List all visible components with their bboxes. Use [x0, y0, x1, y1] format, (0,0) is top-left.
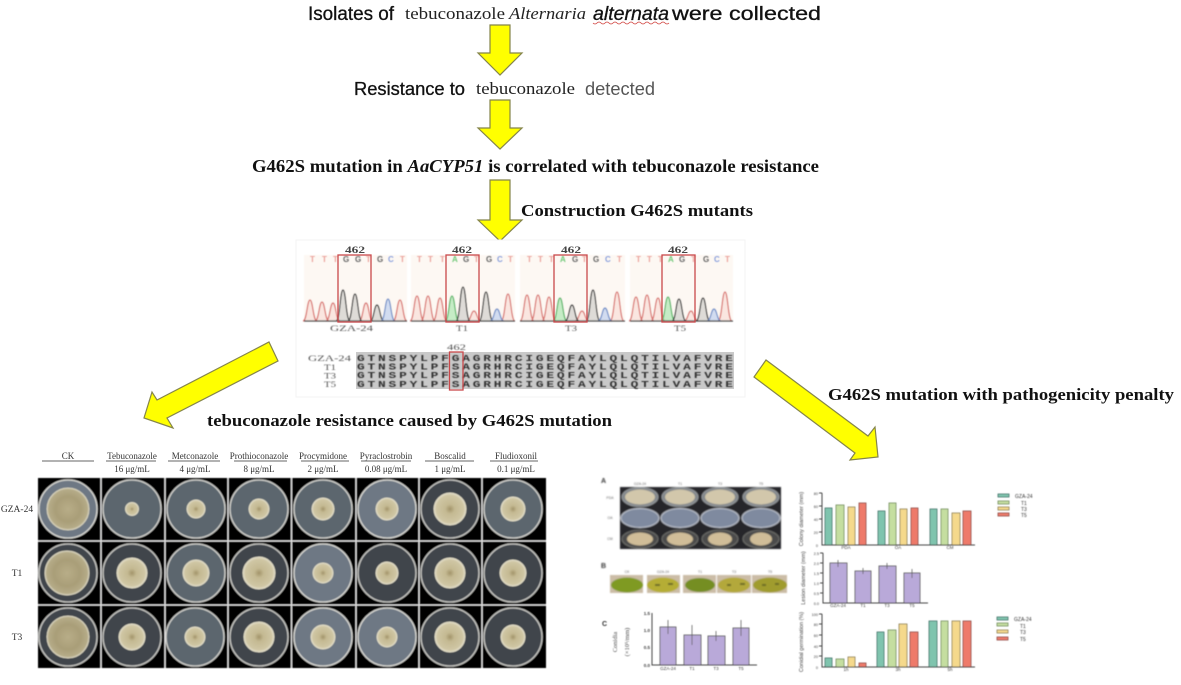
chart: colony diameter: [799, 492, 975, 550]
legend: colony diameter: [998, 494, 1033, 519]
heading: resistance caused by mutation: tebuconazole resistance caused by G462S mutation: [207, 411, 612, 430]
column headers: CK: [62, 451, 75, 461]
codon position labels: 462: [452, 245, 473, 255]
legend: conidial germination: T1: [1020, 624, 1026, 630]
column headers: 4 μg/mL: [179, 464, 211, 474]
sample labels: T1: [456, 323, 468, 333]
subpanel B: infected leaves: T1: [698, 570, 702, 574]
heading: resistance detected: [354, 78, 655, 99]
heading: isolates collected: Alternaria: [508, 4, 586, 23]
trace: T5: [629, 292, 732, 321]
chart: conidial germination: 5h: [947, 667, 953, 672]
chart: lesion diameter: 1.0: [814, 582, 819, 586]
protein alignment: GTNSPYLPFGAGRHRCIGEQFAYLQLQTILVAFVRE: [357, 354, 733, 364]
arrow: resistance to mutation: [478, 100, 522, 149]
column headers: Fludioxonil: [495, 451, 537, 461]
heading: resistance detected: detected: [585, 79, 655, 99]
subpanel A: media plates: CM: [607, 537, 613, 541]
panel: pathogenicity figures: [601, 478, 1033, 672]
subpanel A: media plates: T3: [718, 482, 722, 486]
chart: colony diameter: OA: [895, 545, 901, 550]
heading: isolates collected: were collected: [671, 4, 821, 25]
heading: isolates collected: Isolates of: [308, 4, 395, 25]
heading: resistance detected: tebuconazole: [476, 79, 575, 98]
column headers: Pyraclostrobin: [360, 451, 413, 461]
heading: pathogenicity penalty: G462S mutation with pathogenicity penalty: [828, 385, 1175, 404]
protein alignment: 462: [447, 342, 466, 352]
legend: colony diameter: GZA-24: [1015, 494, 1033, 500]
chart: conidial germination: Conidial germination (%): [799, 612, 805, 672]
row labels: T1: [12, 569, 23, 579]
legend: conidial germination: T5: [1020, 637, 1026, 643]
protein alignment: GTNSPYLPFSAGRHRCIGEQFAYLQLQTILVAFVRE: [357, 371, 733, 381]
row labels: T3: [12, 633, 23, 643]
chart: colony diameter: CM: [946, 545, 954, 550]
column headers: 0.08 μg/mL: [365, 464, 407, 474]
sample labels: GZA-24: [330, 323, 374, 333]
chart: lesion diameter: GZA-24: [830, 603, 846, 608]
subpanel C: conidia bar chart: T1: [689, 666, 695, 671]
subpanel A: media plates: T5: [759, 482, 763, 486]
protein alignment: [308, 342, 734, 390]
column headers: 2 μg/mL: [307, 464, 339, 474]
panel: sequencing figure: [296, 240, 745, 397]
protein alignment: T3: [324, 370, 336, 380]
codon position labels: 462: [668, 245, 689, 255]
subpanel C: conidia bar chart: [602, 611, 757, 671]
heading: isolates collected: alternata: [593, 4, 669, 25]
arrow: mutation to mutants: [478, 180, 522, 241]
column headers: [42, 451, 538, 474]
chart: conidial germination: 40: [814, 645, 818, 649]
subpanel C: conidia bar chart: 0.0: [644, 663, 650, 668]
chart: colony diameter: 0: [816, 544, 818, 548]
subpanel B: infected leaves: T5: [768, 570, 772, 574]
subpanel A: media plates: A: [601, 478, 606, 485]
column headers: 16 μg/mL: [114, 464, 150, 474]
column headers: Prothioconazole: [230, 451, 288, 461]
base calls: TTT A G T G C T: [417, 255, 513, 264]
subpanel B: infected leaves: GZA-24: [657, 570, 669, 574]
chart: conidial germination: 3h: [895, 667, 901, 672]
chart: conidial germination: 0: [816, 666, 818, 670]
heading: construction of mutants: Construction G462S mutants: [521, 201, 754, 220]
row labels: GZA-24: [1, 505, 33, 515]
chart: lesion diameter: T5: [909, 603, 915, 608]
panel: fungicide plate assay: [1, 451, 546, 668]
column headers: 1 μg/mL: [434, 464, 466, 474]
column headers: Metconazole: [172, 451, 218, 461]
chart: colony diameter: Colony diameter (mm): [799, 492, 805, 546]
chart: lesion diameter: T3: [884, 603, 890, 608]
chart: conidial germination: [799, 612, 975, 672]
codon position labels: 462: [561, 245, 582, 255]
chart: colony diameter: 20: [814, 531, 818, 535]
subpanel A: media plates: PDA: [606, 496, 614, 500]
sample labels: T3: [565, 323, 577, 333]
subpanel C: conidia bar chart: T5: [738, 666, 744, 671]
trace: GZA-24: [303, 290, 407, 321]
chart: colony diameter: 80: [814, 492, 818, 496]
heading: isolates collected: [308, 4, 821, 25]
subpanel B: infected leaves: T3: [732, 570, 736, 574]
subpanel A: media plates: T1: [678, 482, 682, 486]
chart: lesion diameter: 1.5: [814, 572, 819, 576]
subpanel B: infected leaves: CK: [625, 570, 630, 574]
legend: colony diameter: T1: [1021, 501, 1027, 507]
heading: mutation correlated: G462S mutation in AaCYP51 is correlated with tebuconazole resistance: [252, 156, 819, 176]
column headers: Tebuconazole: [107, 451, 157, 461]
subpanel C: conidia bar chart: Conidia: [612, 632, 619, 652]
chart: colony diameter: 40: [814, 518, 818, 522]
subpanel C: conidia bar chart: T3: [713, 666, 719, 671]
subpanel C: conidia bar chart: (×10⁵/mm): [624, 628, 631, 656]
subpanel C: conidia bar chart: GZA-24: [660, 666, 676, 671]
arrow: to pathogenicity panel: [754, 360, 878, 460]
base calls: TTT GG T G C T: [310, 255, 405, 264]
row: T3 plates: [39, 608, 542, 666]
protein alignment: T1: [324, 362, 336, 372]
subpanel C: conidia bar chart: 1.0: [644, 628, 650, 633]
chart: conidial germination: 100: [812, 613, 818, 617]
arrow: collected to resistance: [478, 25, 522, 75]
legend: conidial germination: GZA-24: [1014, 617, 1032, 623]
protein alignment: GZA-24: [308, 353, 352, 363]
column headers: Boscalid: [434, 451, 466, 461]
chromatograms: [303, 255, 733, 321]
row: T1 plates: [39, 544, 542, 602]
sample labels: T5: [674, 323, 686, 333]
legend: conidial germination: [997, 617, 1032, 643]
subpanel B: infected leaves: [601, 563, 787, 593]
protein alignment: GTNSPYLPFSAGRHRCIGEQFAYLQLQTILVAFVRE: [357, 363, 733, 373]
subpanel C: conidia bar chart: 1.5: [644, 611, 650, 616]
column headers: 8 μg/mL: [243, 464, 275, 474]
heading: isolates collected: tebuconazole: [405, 4, 505, 23]
protein alignment: T5: [324, 379, 336, 389]
legend: conidial germination: T3: [1020, 630, 1026, 636]
legend: colony diameter: T5: [1021, 513, 1027, 519]
trace: T3: [520, 290, 624, 321]
subpanel A: media plates: GZA-24: [634, 482, 646, 486]
subpanel C: conidia bar chart: 0.5: [644, 645, 650, 650]
chart: lesion diameter: 0.5: [814, 592, 819, 596]
column headers: 0.1 μg/mL: [497, 464, 535, 474]
chart: lesion diameter: 2.0: [814, 562, 819, 566]
chart: lesion diameter: 2.5: [814, 552, 819, 556]
plate grid: [38, 478, 546, 668]
row labels: [1, 505, 33, 643]
chart: lesion diameter: [801, 551, 928, 608]
row: GZA-24 plates: [39, 480, 542, 538]
base calls: [310, 255, 730, 264]
column headers: Procymidone: [299, 451, 347, 461]
chart: colony diameter: PDA: [841, 545, 851, 550]
arrow: to fungicide plates: [144, 342, 278, 428]
chart: lesion diameter: T1: [860, 603, 866, 608]
legend: colony diameter: T3: [1021, 507, 1027, 513]
subpanel A: media plates: [601, 478, 781, 549]
chart: conidial germination: 20: [814, 655, 818, 659]
subpanel C: conidia bar chart: C: [602, 621, 607, 628]
chart: conidial germination: 80: [814, 623, 818, 627]
sample labels: [330, 323, 686, 333]
chart: conidial germination: 60: [814, 634, 818, 638]
codon position labels: [345, 245, 689, 255]
protein alignment: GTNSPYLPFSAGRHRCIGEQFAYLQLQTILVAFVRE: [357, 380, 733, 390]
trace: T1: [410, 287, 515, 321]
chart: colony diameter: 60: [814, 505, 818, 509]
chart: lesion diameter: 0.0: [814, 602, 819, 606]
codon position labels: 462: [345, 245, 366, 255]
base calls: TTT A G T G C T: [636, 255, 730, 264]
subpanel B: infected leaves: B: [601, 563, 606, 570]
heading: resistance detected: Resistance to: [354, 78, 465, 99]
red boxes: codon 462: [338, 255, 695, 322]
base calls: TTT A G T G C T: [527, 255, 622, 264]
subpanel A: media plates: OA: [607, 516, 613, 520]
chart: conidial germination: 1h: [843, 667, 849, 672]
chart: lesion diameter: Lesion diameter (mm): [801, 551, 807, 605]
